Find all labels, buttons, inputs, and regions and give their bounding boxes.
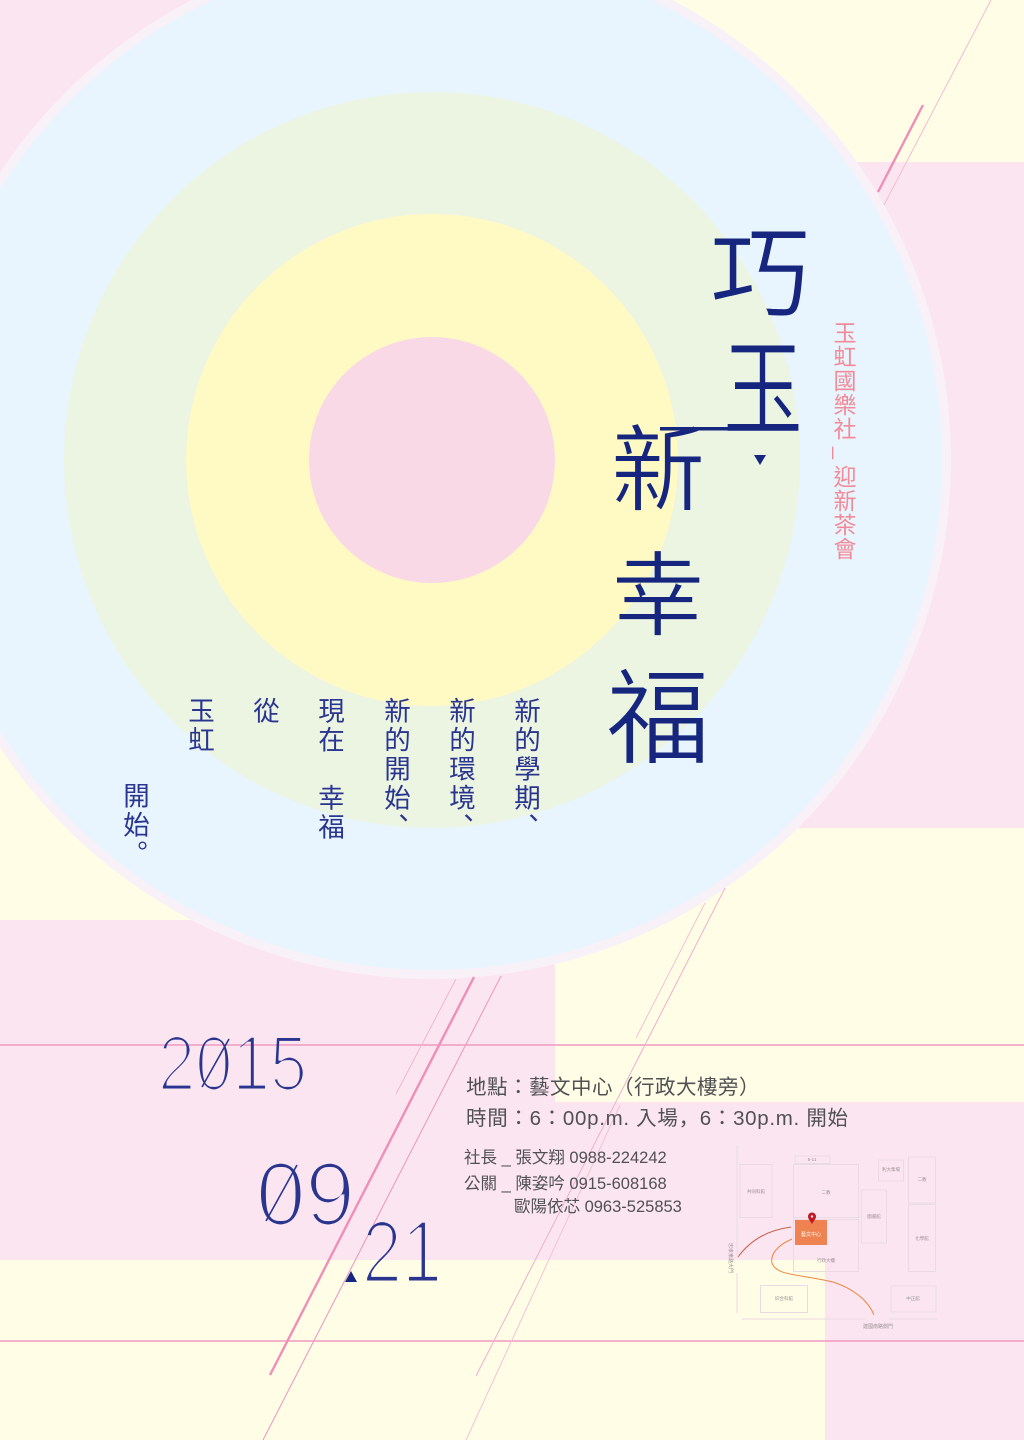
location: 地點：藝文中心（行政大樓旁） [466,1076,760,1099]
main title lettering: 巧 [710,219,810,331]
campus map: 中正館 [906,1295,920,1302]
poem line 6: 玉虹 [184,697,214,755]
poem line 5: 從 [249,697,279,726]
campus map: 化學館 [915,1235,929,1242]
poem line 2: 新的環境 、 [441,697,480,842]
main title lettering: 玉 [723,331,803,450]
president: 社長 _ 張文翔 0988-224242 [464,1149,667,1167]
main title lettering: 新 [611,418,705,523]
main title lettering: 幸 [612,546,704,648]
body copy: vertical poem [115,697,545,869]
poem line 4: 現在 幸福 [314,697,344,842]
publicity second: 歐陽依芯 0963-525853 [514,1198,682,1216]
campus map: 藝文中心 [801,1231,821,1238]
event location and time [466,1076,849,1131]
date numerals: 09 [256,1144,355,1245]
campus map: 二教 [918,1176,927,1183]
campus map: 圖書館 [867,1213,881,1220]
campus map: 5-11 [808,1157,817,1162]
campus map: 行政大樓 [817,1257,835,1264]
poem line 3: 新的開始 、 [376,697,415,842]
poem line 1: 新的學期 、 [506,697,545,842]
campus map: 共同科館 [747,1188,765,1195]
campus map: 二教 [822,1189,831,1196]
club and event name: 玉虹國樂社 _ 迎新茶會 [830,321,856,561]
date numerals: 21 [362,1202,442,1301]
campus map: 忠孝東路大門 [727,1243,734,1273]
main title lettering: 福 [606,662,710,778]
campus map: 綜合科館 [775,1295,793,1302]
time: 時間：6：00p.m. 入場，6：30p.m. 開始 [466,1101,849,1131]
date numerals: 2015 [158,1020,307,1107]
campus map: 利大集場 [882,1166,900,1173]
contacts [464,1148,682,1216]
publicity: 公關 _ 陳姿吟 0915-608168 [464,1175,667,1193]
poem line 7: 開始 。 [115,782,154,869]
campus map: 建國南路側門 [863,1323,893,1330]
